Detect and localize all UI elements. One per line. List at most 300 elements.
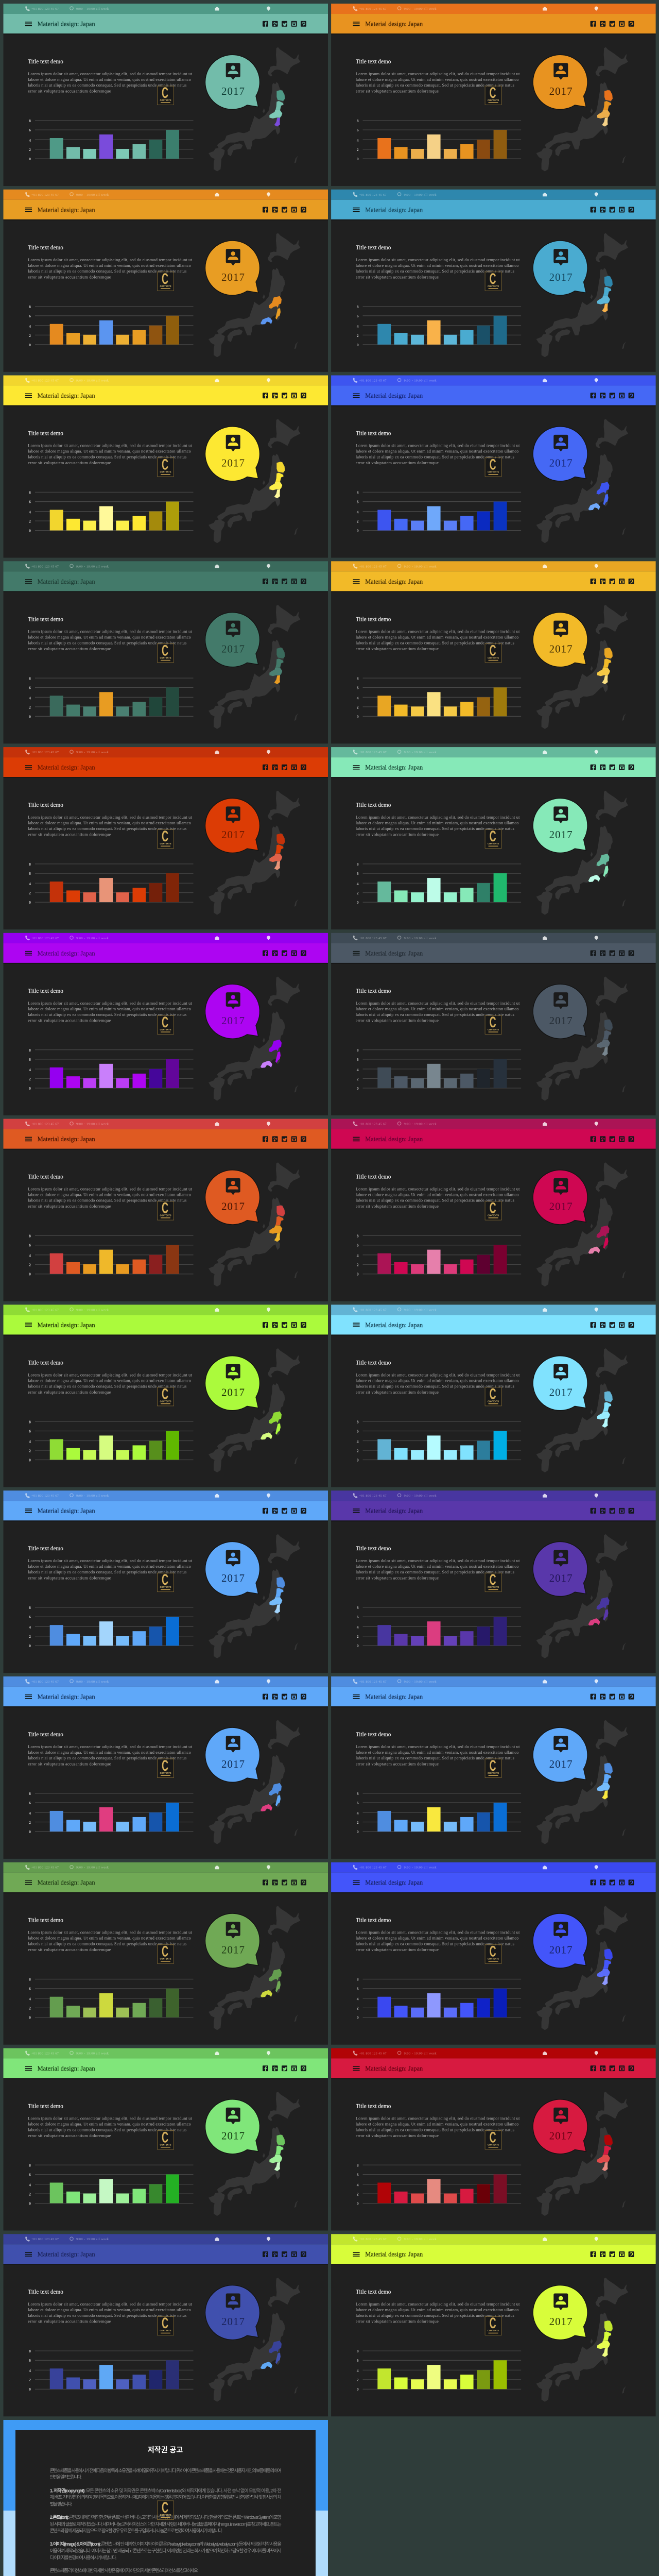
body text: labore et dolore magna aliqua. Ut enim ad minim veniam, quis nostrud exercitaton ullamco (28, 1564, 191, 1569)
contact bar (331, 1490, 656, 1501)
contact bar: +01 800 123 45 67 (31, 2238, 59, 2241)
speech bubble (205, 1170, 260, 1225)
body text: laboris nisi ut aliquip ex ea commodo consquat. Sed ut perspiciatis unde omnis iste natus (356, 1384, 514, 1388)
header: Material design: Japan (38, 764, 95, 771)
panel (331, 1892, 656, 2045)
badge: C (162, 84, 168, 101)
bar chart: 6 (357, 685, 359, 690)
badge: C (490, 1385, 496, 1402)
slide 12: slate (331, 933, 656, 1115)
badge (485, 1385, 501, 1406)
slide 10: mint (331, 747, 656, 929)
speech bubble (533, 1356, 587, 1411)
header: Material design: Japan (365, 206, 423, 213)
bar chart (357, 676, 521, 719)
map of Japan (536, 2092, 628, 2216)
body text: error sit voluptatem accusantium doloremque (28, 89, 111, 94)
body text (356, 72, 520, 94)
contact bar: 9:00 - 19:00 all week (404, 751, 437, 754)
speech bubble (533, 984, 587, 1039)
bar chart: 4 (357, 324, 359, 329)
header (3, 1687, 328, 1706)
badge: C (162, 828, 168, 845)
body text: Lorem ipsum dolor sit amet, consectetur adipiscing elit, sed do eiusmod tempor incidunt ut (28, 1558, 192, 1563)
panel (3, 591, 328, 743)
body text: Lorem ipsum dolor sit amet, consectetur adipiscing elit, sed do eiusmod tempor incidunt ut (28, 1001, 192, 1006)
title: Title text demo (356, 1732, 391, 1738)
body text (28, 444, 192, 465)
bar chart: 4 (357, 696, 359, 700)
bar chart: 2 (357, 1634, 359, 1639)
body text: laboris nisi ut aliquip ex ea commodo consquat. Sed ut perspiciatis unde omnis iste natus (356, 1012, 514, 1017)
body text (28, 2302, 192, 2324)
section 3: image and icon: 3. 이미지(image) & 아이콘(icon): 콘텐츠 내에 단 제외한, 이미지와 아이콘은 Pixabay(pixabay.com)와 Webalys(webalys.com) 등에서 제공된 각각 사용을 (50, 2541, 282, 2547)
map of Japan (536, 47, 628, 172)
bar chart: 8 (357, 1234, 359, 1239)
bar chart: 2 (357, 1077, 359, 1081)
body text: error sit voluptatem accusantium doloremque (356, 1761, 439, 1766)
body text: labore et dolore magna aliqua. Ut enim ad minim veniam, quis nostrud exercitaton ullamco (28, 2122, 191, 2126)
bar chart: 2 (357, 147, 359, 152)
bar chart: 0 (29, 2015, 31, 2020)
bar chart: 0 (357, 2387, 359, 2392)
panel (331, 591, 656, 743)
dark notice card (15, 2430, 316, 2576)
header: Material design: Japan (365, 950, 423, 957)
badge (485, 642, 501, 663)
bar chart: 8 (357, 1605, 359, 1610)
bar chart: 8 (29, 490, 31, 495)
contact bar: 9:00 - 19:00 all week (404, 2238, 437, 2241)
title: Title text demo (356, 988, 391, 994)
body text: error sit voluptatem accusantium doloremque (356, 2319, 439, 2324)
bar chart (29, 304, 194, 347)
badge: CONTENTS (160, 1586, 171, 1588)
header (331, 14, 656, 33)
bar chart: 2 (29, 891, 31, 895)
badge: C (490, 1571, 496, 1588)
badge: CONTENTS (488, 842, 499, 845)
title: Title text demo (28, 1360, 63, 1366)
header (331, 943, 656, 963)
bar chart: 8 (29, 118, 31, 123)
panel (331, 2264, 656, 2416)
contact bar (3, 747, 328, 757)
badge (158, 828, 174, 849)
map of Japan (209, 1348, 300, 1472)
bar chart: 8 (29, 1048, 31, 1053)
speech bubble (205, 1727, 260, 1782)
body text: Lorem ipsum dolor sit amet, consectetur adipiscing elit, sed do eiusmod tempor incidunt ut (28, 1372, 192, 1377)
contact bar: +01 800 123 45 67 (359, 1308, 387, 1312)
bar chart (357, 1234, 521, 1277)
bar chart: 4 (29, 882, 31, 886)
title: Title text demo (28, 1546, 63, 1552)
header (3, 386, 328, 405)
bar chart: 8 (357, 490, 359, 495)
slide 14: crimson (331, 1119, 656, 1301)
map of Japan (209, 233, 300, 357)
body text: laboris nisi ut aliquip ex ea commodo consquat. Sed ut perspiciatis unde omnis iste natus (356, 1570, 514, 1574)
bar chart: 6 (357, 314, 359, 318)
bar chart: 0 (29, 2201, 31, 2206)
map of Japan (209, 2278, 300, 2402)
badge: CONTENTS (160, 99, 171, 101)
bar chart: 8 (357, 1048, 359, 1053)
bar chart: 8 (357, 1977, 359, 1982)
bar chart: 4 (357, 1067, 359, 1072)
title: Title text demo (28, 1918, 63, 1924)
speech bubble: 2017 (221, 828, 245, 841)
body text: labore et dolore magna aliqua. Ut enim ad minim veniam, quis nostrud exercitaton ullamco (28, 1378, 191, 1383)
bar chart: 0 (29, 343, 31, 347)
closing line: 콘텐츠 제품 라이선스에 대한 자세한 사항은 홈페이지 하단의 자세한 콘텐츠라이선스를 참고하세요. (50, 2568, 199, 2573)
badge (158, 2315, 174, 2335)
badge: CONTENTS (488, 1586, 499, 1588)
body text: labore et dolore magna aliqua. Ut enim ad minim veniam, quis nostrud exercitaton ullamco (28, 263, 191, 268)
badge: C (162, 1943, 168, 1960)
speech bubble: 2017 (221, 2129, 245, 2142)
contact bar: 9:00 - 19:00 all week (404, 193, 437, 197)
contact bar: +01 800 123 45 67 (31, 193, 59, 197)
contact bar (3, 1862, 328, 1873)
bar chart: 6 (357, 128, 359, 132)
slide 4: sky blue (331, 190, 656, 372)
speech bubble: 2017 (221, 1758, 245, 1770)
header (331, 571, 656, 591)
header: Material design: Japan (365, 1136, 423, 1143)
bar chart: 0 (357, 2015, 359, 2020)
bar chart: 4 (29, 2368, 31, 2373)
bar chart: 6 (357, 1243, 359, 1248)
contact bar: 9:00 - 19:00 all week (404, 379, 437, 383)
bar chart: 8 (29, 676, 31, 681)
body text (356, 1558, 520, 1581)
bar chart: 0 (29, 529, 31, 533)
speech bubble: 2017 (549, 642, 573, 655)
bar chart (357, 2163, 521, 2206)
intro paragraph (50, 2468, 282, 2480)
speech bubble (533, 798, 587, 853)
badge: CONTENTS (160, 656, 171, 659)
bar chart (29, 2163, 194, 2206)
body text: labore et dolore magna aliqua. Ut enim ad minim veniam, quis nostrud exercitaton ullamco (356, 635, 518, 639)
bar chart: 6 (357, 500, 359, 504)
header (3, 1315, 328, 1334)
body text: labore et dolore magna aliqua. Ut enim ad minim veniam, quis nostrud exercitaton ullamco (28, 821, 191, 825)
header: Material design: Japan (365, 578, 423, 585)
body text: Lorem ipsum dolor sit amet, consectetur adipiscing elit, sed do eiusmod tempor incidunt ut (356, 1744, 520, 1749)
body text (28, 1372, 192, 1395)
bar chart: 0 (357, 343, 359, 347)
title: Title text demo (356, 1546, 391, 1552)
header: Material design: Japan (38, 950, 95, 957)
body text: labore et dolore magna aliqua. Ut enim ad minim veniam, quis nostrud exercitaton ullamco (28, 449, 191, 454)
body text: Lorem ipsum dolor sit amet, consectetur adipiscing elit, sed do eiusmod tempor incidunt ut (356, 815, 520, 820)
header (331, 2058, 656, 2078)
header: Material design: Japan (365, 1879, 423, 1886)
body text: Lorem ipsum dolor sit amet, consectetur adipiscing elit, sed do eiusmod tempor incidunt ut (356, 1372, 520, 1377)
body text: error sit voluptatem accusantium doloremque (28, 833, 111, 837)
badge: CONTENTS (160, 285, 171, 287)
header: Material design: Japan (38, 1879, 95, 1886)
bar chart: 6 (29, 685, 31, 690)
bar chart: 8 (357, 118, 359, 123)
header: Material design: Japan (38, 2251, 95, 2258)
body text: labore et dolore magna aliqua. Ut enim ad minim veniam, quis nostrud exercitaton ullamco (356, 1378, 518, 1383)
contact bar: +01 800 123 45 67 (31, 1308, 59, 1312)
body text: Lorem ipsum dolor sit amet, consectetur adipiscing elit, sed do eiusmod tempor incidunt ut (356, 1558, 520, 1563)
badge (485, 1943, 501, 1963)
contact bar (331, 1304, 656, 1315)
panel (331, 963, 656, 1115)
bar chart: 2 (357, 1448, 359, 1453)
header: Material design: Japan (365, 2251, 423, 2258)
bar chart: 2 (357, 519, 359, 524)
body text (356, 2116, 520, 2138)
body text: laboris nisi ut aliquip ex ea commodo consquat. Sed ut perspiciatis unde omnis iste natus (28, 455, 186, 460)
body text (28, 1930, 192, 1952)
contact bar: +01 800 123 45 67 (31, 1680, 59, 1684)
badge: CONTENTS (488, 2329, 499, 2332)
bar chart: 0 (29, 1458, 31, 1462)
bar chart: 6 (29, 1429, 31, 1433)
body text: laboris nisi ut aliquip ex ea commodo consquat. Sed ut perspiciatis unde omnis iste natus (28, 1942, 186, 1946)
body text: Lorem ipsum dolor sit amet, consectetur adipiscing elit, sed do eiusmod tempor incidunt ut (356, 258, 520, 262)
speech bubble: 2017 (221, 85, 245, 97)
contact bar: 9:00 - 19:00 all week (404, 7, 437, 11)
title: Title text demo (356, 2289, 391, 2295)
panel (331, 1706, 656, 1859)
bar chart: 8 (29, 1977, 31, 1982)
body text: Lorem ipsum dolor sit amet, consectetur adipiscing elit, sed do eiusmod tempor incidunt ut (28, 629, 192, 634)
header (331, 1687, 656, 1706)
body text: labore et dolore magna aliqua. Ut enim ad minim veniam, quis nostrud exercitaton ullamco (356, 77, 518, 82)
body text (356, 444, 520, 465)
speech bubble (533, 2099, 587, 2154)
body text (356, 1001, 520, 1023)
panel (3, 1706, 328, 1859)
slide 20: blue with yellow accent (331, 1676, 656, 1859)
slide 15: lime (3, 1304, 328, 1487)
contact bar (3, 376, 328, 386)
badge: CONTENTS (160, 2329, 171, 2332)
panel (3, 2264, 328, 2416)
badge: CONTENTS (488, 1400, 499, 1402)
body text: labore et dolore magna aliqua. Ut enim ad minim veniam, quis nostrud exercitaton ullamco (356, 1936, 518, 1941)
contact bar (3, 1304, 328, 1315)
badge: CONTENTS (488, 99, 499, 101)
title: Title text demo (28, 2289, 63, 2295)
badge (485, 1200, 501, 1220)
contact bar: 9:00 - 19:00 all week (76, 565, 109, 568)
contact bar: 9:00 - 19:00 all week (404, 937, 437, 940)
map of Japan (209, 791, 300, 915)
body text: Lorem ipsum dolor sit amet, consectetur adipiscing elit, sed do eiusmod tempor incidunt ut (356, 1930, 520, 1935)
contact bar: 9:00 - 19:00 all week (76, 1680, 109, 1684)
bar chart: 2 (29, 519, 31, 524)
bar chart: 2 (357, 333, 359, 338)
contact bar: +01 800 123 45 67 (31, 1123, 59, 1126)
speech bubble (533, 2285, 587, 2340)
panel (331, 777, 656, 929)
body text: error sit voluptatem accusantium doloremque (28, 1947, 111, 1952)
speech bubble (533, 55, 587, 109)
body text (28, 1558, 192, 1581)
contact bar: +01 800 123 45 67 (359, 1680, 387, 1684)
slide 11: purple (3, 933, 328, 1115)
bar chart: 6 (29, 1987, 31, 1991)
badge (485, 456, 501, 477)
body text: laboris nisi ut aliquip ex ea commodo consquat. Sed ut perspiciatis unde omnis iste natus (356, 1942, 514, 1946)
bar chart: 2 (357, 2378, 359, 2382)
bar chart: 8 (29, 1419, 31, 1424)
map of Japan (209, 1534, 300, 1658)
bar chart: 6 (29, 128, 31, 132)
body text: labore et dolore magna aliqua. Ut enim ad minim veniam, quis nostrud exercitaton ullamco (356, 2122, 518, 2126)
bar chart: 4 (29, 510, 31, 515)
badge (158, 84, 174, 105)
bar chart: 4 (357, 1625, 359, 1630)
header: Material design: Japan (365, 764, 423, 771)
bar chart (357, 1605, 521, 1648)
header (331, 2244, 656, 2264)
body text: laboris nisi ut aliquip ex ea commodo consquat. Sed ut perspiciatis unde omnis iste natus (28, 2313, 186, 2318)
bar chart (29, 1791, 194, 1834)
speech bubble (205, 613, 260, 667)
contact bar (3, 4, 328, 14)
badge (485, 1014, 501, 1034)
badge: C (490, 456, 496, 473)
body text: laboris nisi ut aliquip ex ea commodo consquat. Sed ut perspiciatis unde omnis iste natus (28, 1384, 186, 1388)
bar chart: 0 (357, 529, 359, 533)
header (331, 1501, 656, 1520)
speech bubble (205, 798, 260, 853)
body text: Lorem ipsum dolor sit amet, consectetur adipiscing elit, sed do eiusmod tempor incidunt ut (28, 1187, 192, 1192)
body text: laboris nisi ut aliquip ex ea commodo consquat. Sed ut perspiciatis unde omnis iste natus (356, 826, 514, 831)
badge (158, 1014, 174, 1034)
badge: C (490, 84, 496, 101)
contact bar: +01 800 123 45 67 (359, 751, 387, 754)
speech bubble (205, 2099, 260, 2154)
speech bubble: 2017 (549, 2129, 573, 2142)
body text: error sit voluptatem accusantium doloremque (356, 461, 439, 465)
header: Material design: Japan (365, 1507, 423, 1515)
badge (158, 1943, 174, 1963)
badge (158, 270, 174, 291)
badge: C (162, 1014, 168, 1031)
bar chart: 0 (357, 1086, 359, 1091)
speech bubble (205, 1356, 260, 1411)
bar chart: 8 (29, 1791, 31, 1796)
bar chart: 4 (29, 1067, 31, 1072)
header (3, 2058, 328, 2078)
panel (331, 219, 656, 372)
body text (356, 1930, 520, 1952)
badge (158, 1385, 174, 1406)
map of Japan (209, 2092, 300, 2216)
badge: CONTENTS (160, 2514, 171, 2516)
speech bubble: 2017 (549, 2315, 573, 2328)
bar chart: 4 (357, 882, 359, 886)
contact bar: +01 800 123 45 67 (31, 379, 59, 383)
badge: C (162, 1385, 168, 1402)
badge: C (162, 1757, 168, 1774)
contact bar: 9:00 - 19:00 all week (76, 2238, 109, 2241)
bar chart: 6 (29, 500, 31, 504)
contact bar (3, 561, 328, 571)
bar chart: 2 (29, 1263, 31, 1267)
bar chart: 8 (357, 676, 359, 681)
bar chart: 0 (357, 2201, 359, 2206)
panel (3, 777, 328, 929)
slide 19: blue with pink accent (3, 1676, 328, 1859)
map of Japan (536, 1720, 628, 1844)
bar chart: 8 (29, 1234, 31, 1239)
bar chart: 6 (357, 871, 359, 876)
body text: labore et dolore magna aliqua. Ut enim ad minim veniam, quis nostrud exercitaton ullamco (356, 821, 518, 825)
contact bar: 9:00 - 19:00 all week (76, 379, 109, 383)
bar chart: 2 (29, 2378, 31, 2382)
bar chart: 6 (357, 1429, 359, 1433)
body text: laboris nisi ut aliquip ex ea commodo consquat. Sed ut perspiciatis unde omnis iste natus (356, 269, 514, 274)
badge: CONTENTS (160, 1772, 171, 1774)
header (3, 1873, 328, 1892)
body text: Lorem ipsum dolor sit amet, consectetur adipiscing elit, sed do eiusmod tempor incidunt ut (356, 2116, 520, 2121)
body text: error sit voluptatem accusantium doloremque (28, 2133, 111, 2138)
speech bubble (205, 1913, 260, 1968)
body text (356, 258, 520, 279)
badge: C (490, 642, 496, 659)
header: Material design: Japan (38, 1507, 95, 1515)
body text: error sit voluptatem accusantium doloremque (28, 2319, 111, 2324)
bar chart (357, 118, 521, 161)
contact bar: +01 800 123 45 67 (359, 7, 387, 11)
contact bar: +01 800 123 45 67 (31, 751, 59, 754)
header (331, 757, 656, 777)
badge: CONTENTS (488, 471, 499, 473)
slide 17: cornflower blue (3, 1490, 328, 1673)
slide 3: amber orange (3, 190, 328, 372)
bar chart: 4 (29, 1439, 31, 1444)
badge (158, 1757, 174, 1777)
body text: Lorem ipsum dolor sit amet, consectetur adipiscing elit, sed do eiusmod tempor incidunt ut (28, 815, 192, 820)
contact bar: 9:00 - 19:00 all week (404, 2052, 437, 2055)
contact bar (331, 933, 656, 943)
contact bar (331, 4, 656, 14)
panel (3, 33, 328, 186)
bar chart: 0 (357, 1829, 359, 1834)
bar chart: 0 (29, 714, 31, 719)
speech bubble (205, 984, 260, 1039)
bar chart (357, 862, 521, 905)
header (3, 943, 328, 963)
badge: C (490, 1943, 496, 1960)
panel (331, 1520, 656, 1673)
body text: laboris nisi ut aliquip ex ea commodo consquat. Sed ut perspiciatis unde omnis iste natus (28, 2127, 186, 2132)
map of Japan (536, 1348, 628, 1472)
bar chart (29, 1234, 194, 1277)
contact bar (3, 1490, 328, 1501)
badge (158, 2499, 174, 2519)
contact bar: +01 800 123 45 67 (359, 1123, 387, 1126)
badge: C (162, 2499, 168, 2516)
bar chart: 8 (357, 862, 359, 867)
bar chart: 8 (357, 1419, 359, 1424)
section 1: copyright: 1. 저작권(copyright): 모든 콘텐츠의 소유 및 저작권은 콘텐츠박스(Contentsbox)와 제작자에게 있습니다. 사전 승낙 없이 모방적 이용, 2차 전 (50, 2487, 282, 2494)
badge: C (162, 1200, 168, 1217)
intro paragraph: 콘텐츠 제품을 사용하시기 전에 다음의 항목과 소유권을 사례에 알려 주시기 바랍니다. 위하여 이 콘텐츠 제품을 사용하는 것은 사용자 개인의 보증에 동의하여 (50, 2468, 282, 2473)
